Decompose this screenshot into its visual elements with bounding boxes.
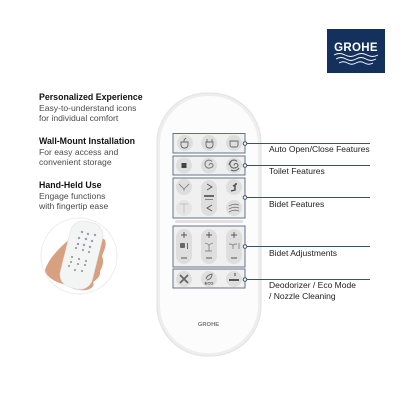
logo: GROHE brand badge <box>327 29 385 73</box>
callout lines <box>243 142 370 281</box>
remote GROHE wordmark: GROHE <box>198 322 219 328</box>
label: auto open close: Auto Open/Close Features <box>269 144 370 154</box>
logo: GROHE brand badge: GROHE <box>334 42 378 54</box>
remote panel: auto open close <box>173 134 245 153</box>
label: deodorizer eco nozzle: Deodorizer / Eco Mode <box>269 280 356 290</box>
label: deodorizer eco nozzle <box>269 280 356 301</box>
heading: wall-mount installation <box>39 136 135 167</box>
heading: hand-held use: Engage functions <box>39 191 105 201</box>
heading: wall-mount installation: Wall-Mount Installation <box>39 136 135 146</box>
heading: hand-held use <box>39 180 108 211</box>
heading: personalized experience: Easy-to-understand icons <box>39 103 136 113</box>
photo: hand holding remote <box>41 218 117 294</box>
heading: personalized experience: Personalized Experience <box>39 92 143 102</box>
remote panel: deodorizer eco nozzle: ECO <box>205 280 213 286</box>
heading: wall-mount installation: For easy access and <box>39 147 118 157</box>
label: toilet features: Toilet Features <box>269 166 325 176</box>
heading: hand-held use: Hand-Held Use <box>39 180 102 190</box>
heading: wall-mount installation: convenient storage <box>39 157 112 167</box>
remote control body <box>157 93 261 356</box>
heading: hand-held use: with fingertip ease <box>39 201 108 211</box>
divider bar on remote <box>175 220 243 223</box>
remote panel: bidet adjustments <box>173 226 245 267</box>
heading: personalized experience: for individual comfort <box>39 113 118 123</box>
remote panel: deodorizer eco nozzle <box>173 269 245 288</box>
heading: personalized experience <box>39 92 143 123</box>
label: bidet features: Bidet Features <box>269 199 324 209</box>
label: bidet adjustments: Bidet Adjustments <box>269 248 337 258</box>
remote panel: toilet <box>173 156 245 175</box>
label: deodorizer eco nozzle: / Nozzle Cleaning <box>269 291 336 301</box>
remote panel: bidet features <box>173 178 245 218</box>
